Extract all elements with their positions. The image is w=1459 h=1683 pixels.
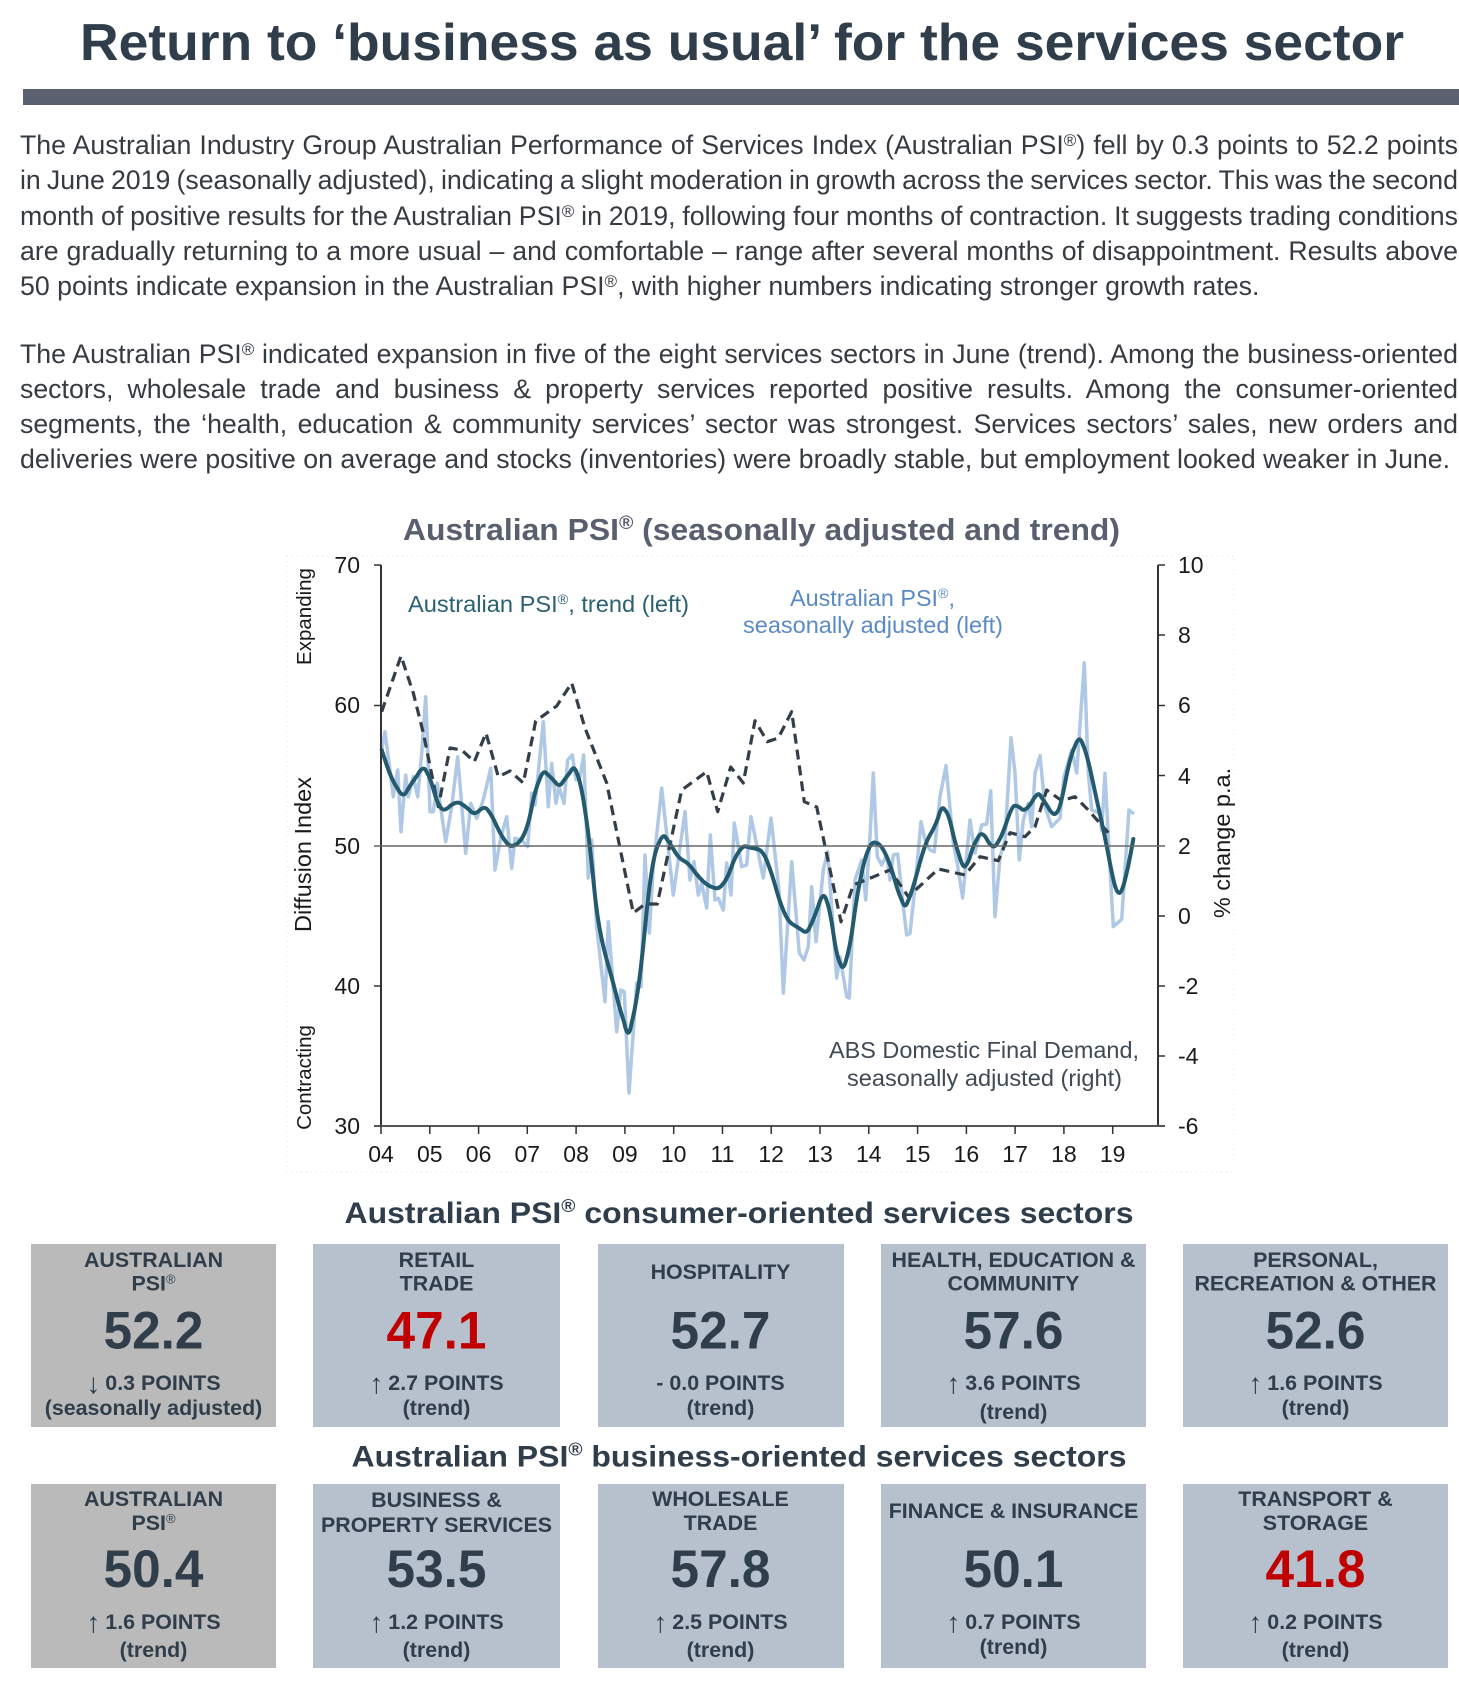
card: business and property services: BUSINESS & [371,1488,502,1512]
card: Australian PSI trend: (trend) [120,1638,187,1662]
card: retail trade: RETAIL [399,1248,474,1272]
card: Australian PSI seasonally adjusted: PSI [131,1272,166,1296]
card: personal, recreation and other: 52.6 [1266,1302,1366,1360]
card: Australian PSI seasonally adjusted: 52.2 [104,1302,204,1360]
card: health, education and community: 57.6 [964,1302,1064,1360]
intro paragraph 1: in June 2019 (seasonally adjusted), indicating a slight moderation in growth across the services sector. This was the second [20,165,1458,195]
card: retail trade: TRADE [400,1272,473,1296]
card: wholesale trade: (trend) [687,1638,754,1662]
card: Australian PSI seasonally adjusted: (seasonally adjusted) [45,1396,262,1420]
x axis labels: 14 [856,1141,882,1167]
left axis titles [290,568,316,1130]
card: hospitality: 52.7 [670,1302,770,1360]
intro paragraph 2: sectors, wholesale trade and business & property services reported positive results. Among the consumer-oriented [20,374,1458,404]
intro paragraph 2: deliveries were positive on average and stocks (inventories) were broadly stable, but employment looked weaker in June. [20,444,1450,474]
intro paragraph 1 [20,130,1458,301]
card: Australian PSI seasonally adjusted: 0.3 POINTS [99,1371,221,1395]
card: transport and storage: STORAGE [1263,1511,1368,1535]
left axis labels: 70 [334,552,360,578]
card: retail trade: (trend) [403,1396,470,1420]
left axis labels: 40 [334,973,360,999]
x axis labels [368,1141,1125,1167]
right axis labels: 0 [1178,903,1191,929]
series label: seasonally adjusted: Australian PSI [790,585,936,611]
card: hospitality: (trend) [687,1396,754,1420]
card: business and property services: PROPERTY SERVICES [321,1513,552,1537]
card: Australian PSI seasonally adjusted [31,1244,276,1427]
card: finance and insurance [881,1484,1146,1668]
x axis labels: 09 [612,1141,638,1167]
right axis labels: 8 [1178,622,1191,648]
chart title: Australian PSI [403,512,613,547]
card: transport and storage: 41.8 [1266,1540,1366,1599]
left axis titles: Expanding [293,568,316,665]
chart title [403,512,1120,547]
card: health, education and community [881,1244,1146,1427]
card: health, education and community: 3.6 POINTS [959,1371,1081,1395]
heading: consumer-oriented sectors: consumer-oriented services sectors [575,1197,1134,1230]
x axis labels: 19 [1100,1141,1125,1167]
card: retail trade: 2.7 POINTS [382,1371,504,1395]
left axis labels [334,552,360,1139]
x axis labels: 07 [515,1141,540,1167]
right axis labels [1178,552,1204,1139]
card: transport and storage: 0.2 POINTS [1261,1610,1383,1634]
x axis labels: 13 [807,1141,833,1167]
card: health, education and community: ↑ [946,1368,960,1399]
series label: domestic final demand [829,1037,1139,1091]
card: business and property services: 53.5 [386,1540,486,1599]
card: business and property services: (trend) [403,1638,470,1662]
heading: consumer-oriented sectors: ® [561,1196,575,1216]
card: personal, recreation and other: PERSONAL, [1253,1248,1378,1272]
intro paragraph 2: segments, the ‘health, education & community services’ sector was strongest. Services sectors’ sales, new orders and [20,409,1458,439]
chart title: ® [619,513,633,534]
chart: Australian PSI seasonally adjusted and trend [287,512,1235,1172]
heading: business-oriented sectors: Australian PSI [352,1440,555,1474]
card: Australian PSI trend [31,1484,276,1668]
intro paragraph 1: The Australian Industry Group Australian Performance of Services Index (Australian PSI®) fell by 0.3 points to 52.2 points [20,130,1458,160]
card: finance and insurance: 0.7 POINTS [959,1610,1081,1634]
card: finance and insurance: (trend) [980,1635,1047,1659]
card: wholesale trade: 2.5 POINTS [666,1610,788,1634]
left axis titles: Diffusion Index [290,777,316,932]
x axis labels: 15 [905,1141,930,1167]
series label: seasonally adjusted: seasonally adjusted (left) [743,612,1003,638]
card: transport and storage [1183,1484,1448,1668]
card: health, education and community: HEALTH, EDUCATION & [892,1248,1136,1272]
intro paragraph 2: The Australian PSI® indicated expansion in five of the eight services sectors in June (trend). Among the business-oriented [20,339,1458,369]
card: hospitality: - 0.0 POINTS [656,1371,785,1395]
card: finance and insurance: FINANCE & INSURANCE [889,1499,1138,1523]
card: hospitality: HOSPITALITY [651,1260,790,1284]
card: retail trade [313,1244,560,1427]
x axis labels: 17 [1002,1141,1028,1167]
card: business and property services: 1.2 POINTS [382,1610,504,1634]
x axis labels: 08 [563,1141,589,1167]
card: transport and storage: TRANSPORT & [1238,1487,1393,1511]
x axis labels: 04 [368,1141,394,1167]
series label: domestic final demand: ABS Domestic Final Demand, [829,1037,1139,1063]
card: wholesale trade: ↑ [653,1607,667,1638]
right axis labels: -2 [1178,973,1198,999]
series label: domestic final demand: seasonally adjusted (right) [847,1065,1122,1091]
card: hospitality [598,1244,844,1427]
heading: consumer-oriented sectors: Australian PSI [344,1197,548,1230]
card: Australian PSI seasonally adjusted: ↓ [86,1368,100,1399]
card: wholesale trade: WHOLESALE [652,1487,789,1511]
right axis labels: 10 [1178,552,1204,578]
card: health, education and community: COMMUNITY [948,1272,1079,1296]
card: wholesale trade: TRADE [684,1511,757,1535]
right axis title: % change p.a. [1209,768,1235,918]
card: wholesale trade [598,1484,844,1668]
right axis labels: 4 [1178,763,1191,789]
right axis labels: 2 [1178,833,1191,859]
card: business and property services [313,1484,560,1668]
series label: trend: , trend (left) [568,591,689,617]
series label: seasonally adjusted [743,585,1003,638]
x axis labels: 10 [661,1141,686,1167]
chart title: (seasonally adjusted and trend) [633,512,1120,547]
card: Australian PSI trend: 50.4 [104,1540,204,1599]
card: transport and storage: ↑ [1248,1607,1262,1638]
x axis labels: 18 [1051,1141,1077,1167]
series: seasonally adjusted [382,663,1134,1093]
series label: trend: Australian PSI [408,591,554,617]
left axis titles: Contracting [293,1025,316,1130]
left axis labels: 60 [334,692,360,718]
card: retail trade: ↑ [369,1368,383,1399]
x axis labels: 06 [466,1141,491,1167]
card: personal, recreation and other: (trend) [1282,1396,1349,1420]
right axis labels: 6 [1178,692,1191,718]
card: Australian PSI trend: AUSTRALIAN [84,1487,223,1511]
right axis labels: -4 [1178,1043,1199,1069]
card: Australian PSI trend: ↑ [86,1607,100,1638]
axes [374,565,1165,1134]
title: Return to ‘business as usual’ for the services sector [80,14,1404,72]
card: Australian PSI trend: PSI [131,1511,166,1535]
card: wholesale trade: 57.8 [670,1540,770,1599]
x axis labels: 12 [758,1141,784,1167]
intro paragraph 1: are gradually returning to a more usual – and comfortable – range after several months of disappointment. Results above [20,236,1458,266]
series: trend [382,739,1133,1033]
heading: business-oriented sectors: business-oriented services sectors [583,1440,1126,1474]
card: Australian PSI seasonally adjusted: ® [166,1272,176,1286]
card: health, education and community: (trend) [980,1400,1047,1424]
intro paragraph 2 [20,339,1458,474]
title rule bar [23,89,1459,105]
left axis labels: 30 [334,1113,360,1139]
card: personal, recreation and other: ↑ [1248,1368,1262,1399]
card: personal, recreation and other: 1.6 POINTS [1261,1371,1383,1395]
series label: seasonally adjusted: ® [938,585,949,601]
card: business and property services: ↑ [369,1607,383,1638]
card: Australian PSI trend: 1.6 POINTS [99,1610,221,1634]
intro paragraph 1: 50 points indicate expansion in the Australian PSI®, with higher numbers indicating stronger growth rates. [20,271,1259,301]
card: Australian PSI trend: ® [166,1511,176,1526]
right axis labels: -6 [1178,1113,1198,1139]
intro paragraph 1: month of positive results for the Australian PSI® in 2019, following four months of contraction. It suggests trading conditions [20,201,1458,231]
series label: seasonally adjusted: , [949,585,955,611]
card: Australian PSI seasonally adjusted: AUSTRALIAN [84,1248,223,1272]
card: transport and storage: (trend) [1282,1638,1349,1662]
left axis labels: 50 [334,833,360,859]
x axis labels: 11 [711,1141,734,1167]
series label: trend: ® [558,591,569,607]
series: domestic final demand (dashed) [382,656,1108,922]
x axis labels: 05 [417,1141,443,1167]
card: finance and insurance: 50.1 [964,1540,1064,1599]
heading: business-oriented sectors: ® [568,1440,583,1460]
card: finance and insurance: ↑ [946,1607,960,1638]
card: personal, recreation and other [1183,1244,1448,1427]
x axis labels: 16 [954,1141,979,1167]
card: retail trade: 47.1 [386,1302,486,1360]
card: personal, recreation and other: RECREATION & OTHER [1194,1272,1437,1296]
